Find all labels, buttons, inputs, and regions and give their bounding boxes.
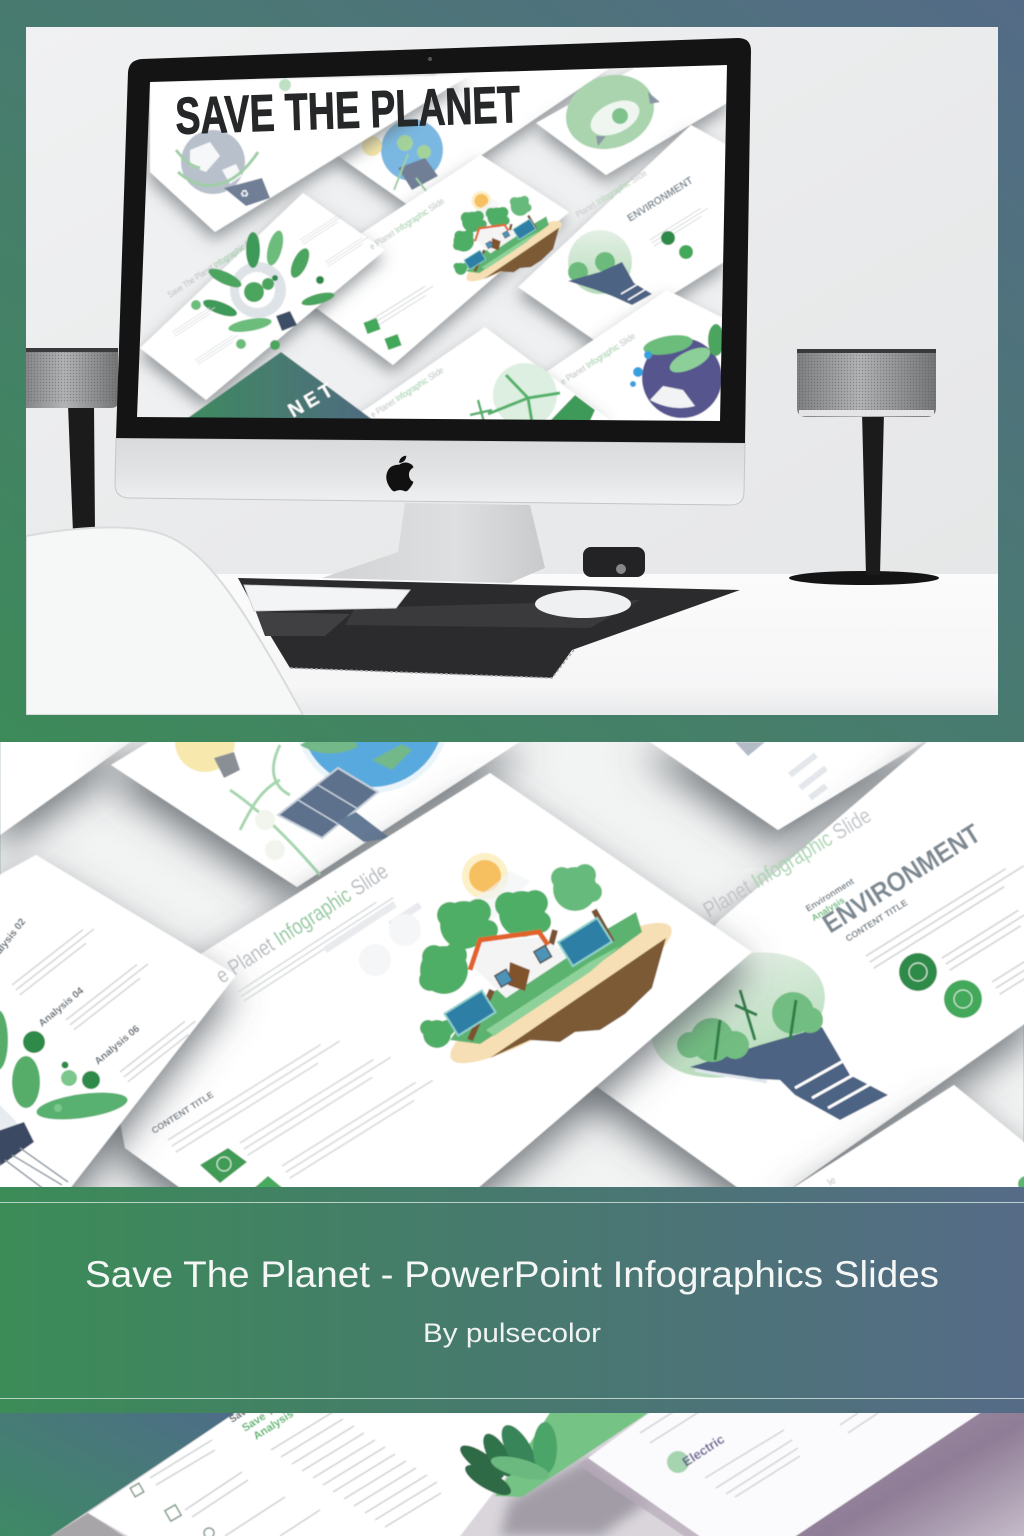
icons: small list icons [130, 1483, 214, 1536]
label: save the analysis [240, 1397, 296, 1445]
illustration: house on floating island [419, 853, 685, 1083]
small camera device [583, 547, 645, 577]
teal cover slide [0, 1405, 247, 1536]
right speaker [789, 349, 939, 585]
keyboard [244, 585, 410, 611]
left speaker [20, 348, 118, 533]
slide: earth with leaves [544, 290, 722, 421]
label: content title: CONTENT TITLE [150, 1090, 215, 1136]
slide: dark green cover [185, 352, 373, 422]
label: save the analysis: Save The [240, 1398, 287, 1435]
slide: top right [640, 735, 935, 830]
slide: wind turbines [359, 328, 609, 420]
slide: environment light bulb: ENVIRONMENT [625, 174, 696, 225]
green strip [495, 1405, 660, 1497]
chair [26, 527, 303, 715]
slide: wind turbines: e Planet Infographic Slide [369, 365, 445, 420]
icon: green clock dark [899, 953, 937, 991]
heading: save the planet: SAVE THE PLANET [174, 76, 521, 146]
icon: green clock light [944, 980, 982, 1018]
label: save the: Save [228, 1403, 254, 1426]
author: By pulsecolor [423, 1318, 601, 1348]
label: analysis [0, 916, 142, 1067]
monitor stand [322, 503, 545, 583]
slide: lower right: le [826, 1175, 839, 1189]
slide: leaf bulb: Save The Planet Infographic Slide [166, 232, 262, 300]
desk pad [238, 578, 740, 678]
panel: bottom slide collage [0, 1397, 1024, 1536]
label: analysis: Analysis 04 [37, 985, 86, 1029]
slide: house island details: e Planet Infographic Slide [368, 196, 446, 252]
slide: environment light bulb: Planet Infographic Slide [574, 168, 649, 220]
gray wedge [45, 1513, 130, 1536]
slide: electric [578, 1400, 992, 1536]
slide: top left corner [0, 735, 140, 835]
icon: light bulb with turbines [652, 952, 888, 1120]
icon: electric [667, 1451, 689, 1473]
faded cloud chart [325, 904, 420, 950]
label: environment analysis: Analysis [810, 895, 846, 923]
label: environment analysis: Environment [804, 876, 856, 914]
slide: house island base [284, 155, 569, 365]
slide: recycling globe [150, 75, 470, 232]
heading: environment: ENVIRONMENT [817, 818, 986, 939]
gray shadow gap [500, 1458, 650, 1536]
slide: environment light bulb [518, 125, 727, 342]
screen with slide collage [130, 60, 740, 430]
label: electric: Electric [679, 1431, 727, 1470]
slide: top right globe [536, 63, 727, 175]
icon: dark green leaves [456, 1420, 557, 1501]
slide: solar panel and earth [98, 742, 533, 914]
slide title: Planet Infographic Slide [699, 802, 875, 922]
slide: bulb with leaves on left [0, 855, 236, 1195]
slide: dark green cover: NET [284, 377, 341, 422]
title: Save The Planet - PowerPoint Infographics Slides [85, 1254, 939, 1295]
apple logo [386, 456, 414, 491]
icon: leaves [0, 1010, 129, 1190]
panel: desktop photo with monitor [20, 27, 998, 715]
slide: solar earth [334, 68, 610, 205]
icon: green checkmark diamond [200, 1148, 247, 1183]
slide: recycling globe: ♻ [240, 189, 249, 200]
monitor bezel [116, 38, 751, 443]
slide: house island base [100, 773, 752, 1195]
label: save the analysis: Analysis [251, 1408, 296, 1443]
monitor chin [115, 438, 745, 505]
label: analysis: Analysis 06 [93, 1023, 142, 1067]
desk surface [216, 574, 998, 715]
slide: text list [88, 1397, 555, 1536]
slide: environment with bulb [578, 735, 1024, 1195]
slide: house island infographic details [150, 853, 685, 1200]
mouse [535, 590, 631, 618]
panel: zoomed slide collage [0, 742, 1024, 1187]
slide title: e Planet Infographic Slide [211, 858, 392, 988]
slide: earth with leaves: e Planet Infographic Slide [559, 331, 637, 387]
title band [0, 1187, 1024, 1413]
slide: house island details [363, 191, 567, 350]
wall [26, 27, 998, 587]
right purple shadow [790, 1405, 1024, 1536]
page background gradient [0, 0, 1024, 742]
label: content title: CONTENT TITLE [844, 898, 909, 944]
slide: lower right [782, 1085, 1024, 1195]
slide: leaf bulb [140, 193, 385, 400]
